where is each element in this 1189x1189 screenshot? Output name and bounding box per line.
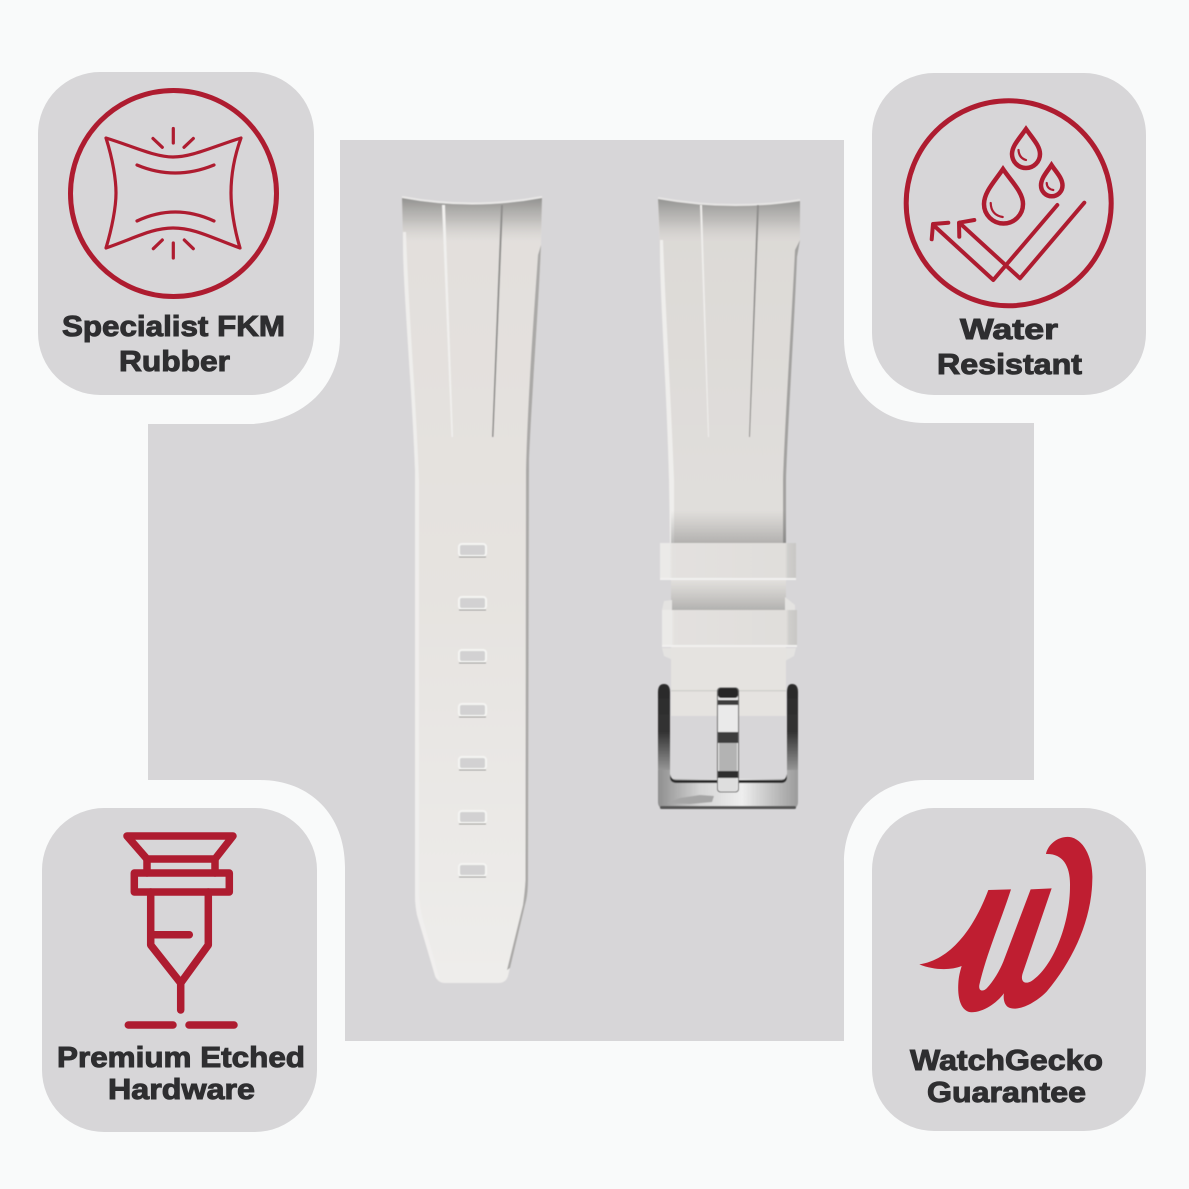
card	[38, 72, 314, 395]
card	[872, 808, 1146, 1131]
icon: laser etching nozzle	[127, 836, 234, 1025]
background panel: central cross shape	[148, 140, 1034, 1041]
card	[872, 73, 1146, 395]
buckle tongue	[718, 688, 738, 792]
strap body	[402, 197, 542, 983]
keeper side tabs	[662, 597, 796, 661]
text: Specialist FKM Rubber: Rubber	[119, 346, 230, 378]
text: Water Resistant	[937, 314, 1082, 381]
icon: WatchGecko W logo	[919, 837, 1092, 1012]
hole shadows	[459, 557, 486, 877]
text: Water Resistant: Resistant	[937, 349, 1082, 381]
text: WatchGecko Guarantee	[910, 1045, 1103, 1109]
white rubber strap: buckle piece	[658, 197, 800, 716]
text: WatchGecko Guarantee: Guarantee	[927, 1077, 1086, 1109]
white rubber strap: long piece	[402, 196, 542, 983]
text: Premium Etched Hardware: Hardware	[108, 1074, 255, 1106]
icon: water drops and arrows in circle	[906, 101, 1111, 306]
strap body	[658, 198, 800, 716]
card	[42, 808, 317, 1132]
keeper loops	[660, 543, 796, 580]
buckle bottom bar	[658, 770, 798, 809]
text: Premium Etched Hardware: Premium Etched	[57, 1042, 305, 1074]
text: Premium Etched Hardware	[57, 1042, 305, 1106]
text: WatchGecko Guarantee: WatchGecko	[910, 1045, 1103, 1077]
buckle frame sides	[658, 684, 670, 775]
text: Specialist FKM Rubber: Specialist FKM	[62, 311, 285, 343]
text: Specialist FKM Rubber	[62, 311, 285, 378]
panel: WatchGecko guarantee	[872, 808, 1146, 1131]
steel buckle	[658, 684, 798, 809]
buckle etched mark	[667, 795, 714, 804]
panel: premium etched hardware	[42, 808, 317, 1132]
panel: water resistant	[872, 73, 1146, 395]
panel: specialist FKM rubber	[38, 72, 314, 395]
strap holes	[459, 544, 486, 876]
icon: stretching rubber in circle	[70, 90, 276, 296]
text: Water Resistant: Water	[960, 314, 1058, 346]
